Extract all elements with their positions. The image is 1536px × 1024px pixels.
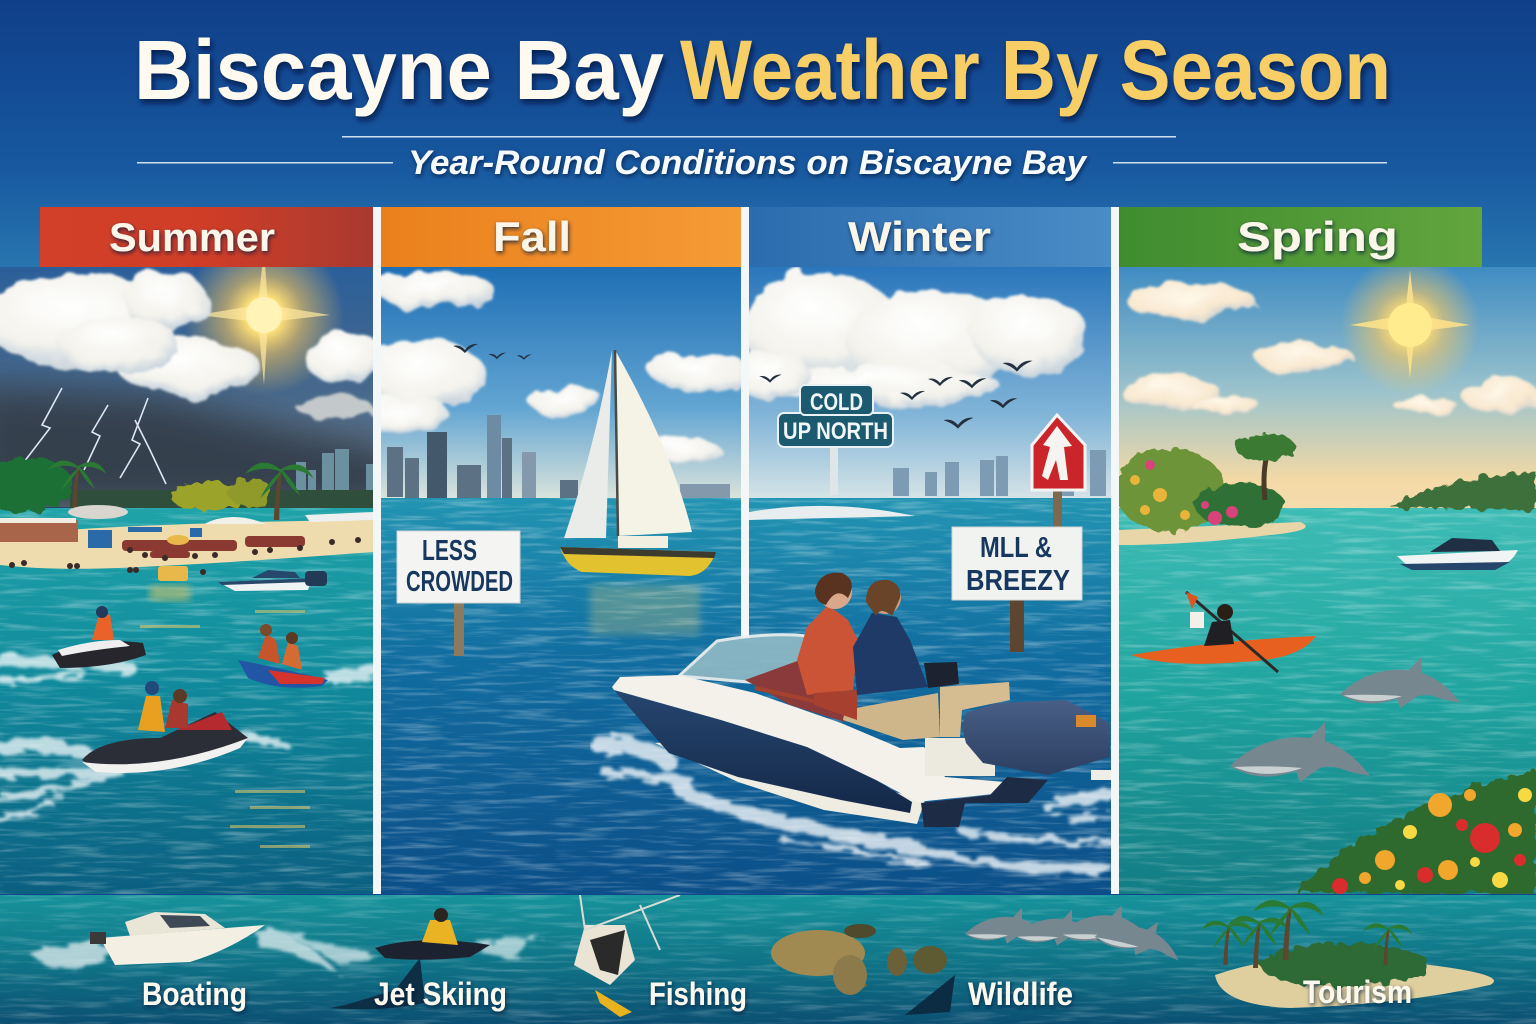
sign: less crowded: LESS xyxy=(422,535,477,567)
sign: cold up north: COLD xyxy=(810,389,863,416)
icon: summer sun xyxy=(188,267,341,392)
boat seats xyxy=(843,682,1010,776)
winter birds xyxy=(759,361,1033,429)
spring clouds xyxy=(1120,282,1536,413)
motorboat xyxy=(612,573,1111,827)
sign: red warning xyxy=(1032,415,1085,528)
distant white sandbar xyxy=(749,506,915,520)
boat hull xyxy=(612,675,1005,824)
icon: boating xyxy=(30,912,340,975)
sign: cold up north: UP NORTH xyxy=(783,418,888,445)
sea xyxy=(741,498,1111,894)
header: winter: Winter xyxy=(848,213,991,260)
beach with crowd xyxy=(0,505,373,581)
dolphin 1 xyxy=(1340,657,1460,708)
jet ski 3 xyxy=(82,681,248,773)
title: Biscayne Bay xyxy=(134,23,664,117)
sign: mild and breezy xyxy=(952,527,1082,652)
page background xyxy=(0,0,1536,300)
panel: fall xyxy=(350,267,750,894)
sea xyxy=(1119,508,1536,894)
title: Weather By Season xyxy=(680,23,1391,117)
sign: mild and breezy: MLL & xyxy=(980,532,1052,564)
icon: dolphin pod xyxy=(965,905,1185,964)
icon: fishing xyxy=(574,895,680,1017)
header: fall xyxy=(381,207,741,267)
fall birds xyxy=(453,344,532,360)
subtitle with rules: Year-Round Conditions on Biscayne Bay xyxy=(408,144,1088,182)
flowered island xyxy=(1115,433,1306,545)
header: spring xyxy=(1119,207,1482,267)
sign: less crowded xyxy=(397,531,520,656)
header: summer: Summer xyxy=(109,216,275,260)
dolphin 2 xyxy=(1230,722,1370,782)
sea xyxy=(0,508,373,894)
flower bush xyxy=(1295,770,1536,894)
header: fall: Fall xyxy=(493,213,571,260)
fall clouds xyxy=(350,272,750,464)
sign: mild and breezy: BREEZY xyxy=(966,565,1070,597)
spring sun xyxy=(1340,255,1480,395)
jet ski 1 xyxy=(52,606,146,668)
miami skyline xyxy=(296,449,373,494)
panel dividers xyxy=(373,207,1119,894)
woman in orange jacket xyxy=(797,573,858,720)
label: jet skiing: Jet Skiing xyxy=(374,976,507,1012)
tropical trees xyxy=(0,457,272,513)
storm clouds xyxy=(0,270,400,510)
panel: summer xyxy=(0,267,373,894)
header: spring: Spring xyxy=(1237,213,1398,260)
spring speedboat xyxy=(1397,538,1518,570)
label: fishing: Fishing xyxy=(649,976,747,1012)
small motorboat xyxy=(218,570,327,591)
panel: activities strip xyxy=(0,895,1536,1024)
title xyxy=(134,23,1391,117)
fall skyline xyxy=(387,415,730,498)
sailboat xyxy=(560,350,716,635)
boat cockpit and rail xyxy=(745,660,845,722)
sign: cold up north xyxy=(778,385,893,447)
winter clouds xyxy=(730,273,1090,405)
kayaker xyxy=(1131,592,1316,672)
icon: tropical island xyxy=(1201,900,1494,1008)
label: tourism: Tourism xyxy=(1303,974,1412,1010)
sign: less crowded: CROWDED xyxy=(406,566,513,598)
header: summer xyxy=(40,207,373,267)
label: wildlife: Wildlife xyxy=(968,976,1073,1012)
icon: jet ski xyxy=(280,908,540,1009)
distant treeline xyxy=(70,490,373,510)
label: boating: Boating xyxy=(142,976,247,1012)
distant shore xyxy=(1390,472,1536,510)
panel: spring xyxy=(1115,255,1536,894)
boat windshield xyxy=(679,635,840,690)
winter skyline xyxy=(830,445,1106,496)
man in navy jacket xyxy=(853,580,959,695)
season headers xyxy=(40,207,1482,267)
lightning bolts xyxy=(24,388,166,484)
panel: winter xyxy=(730,267,1111,894)
boat wake xyxy=(600,745,1110,869)
outboard engine xyxy=(921,700,1111,827)
wave foam xyxy=(0,662,373,820)
header: winter xyxy=(749,207,1111,267)
jet ski 2 xyxy=(238,624,328,688)
sun glints xyxy=(140,585,310,848)
icon: sea turtles xyxy=(771,924,955,1015)
sea xyxy=(381,498,741,894)
